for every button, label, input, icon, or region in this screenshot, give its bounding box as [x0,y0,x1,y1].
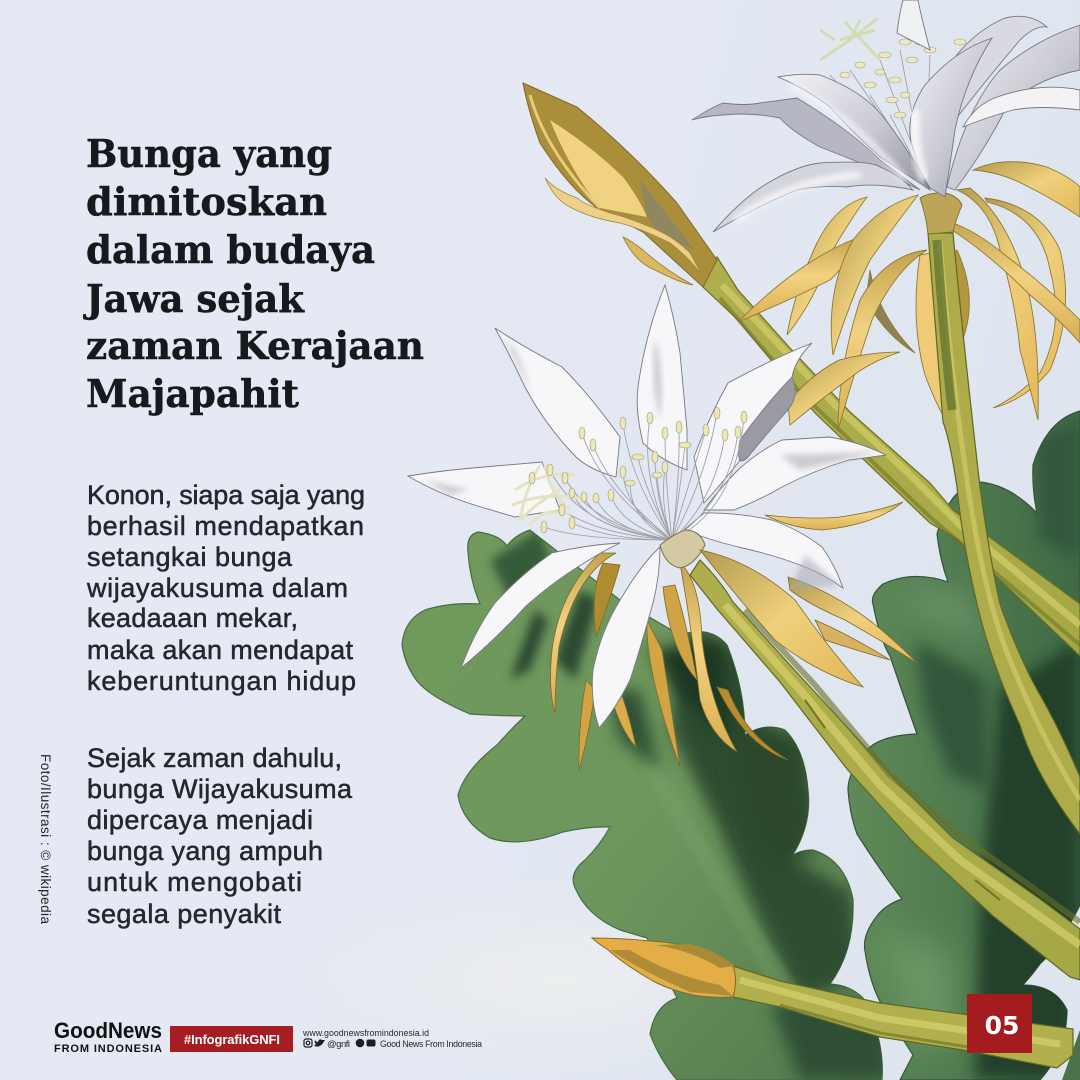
icon: youtube [366,1040,376,1046]
central flower anthers [529,407,747,533]
title: Majapahit [86,371,299,416]
central flower gold sepals [551,352,917,770]
flower: central white flower [408,285,917,770]
text block: keberuntungan: berhasil mendapatkan [87,511,364,541]
photo credit: Foto/Ilustrasi : © wikipedia [38,754,53,924]
text block: pengobatan: untuk mengobati [87,867,302,897]
leaf: large left cactus leaf [402,530,890,1080]
website and social media [302,1028,482,1050]
text block: keberuntungan: setangkai bunga [87,542,293,572]
stem: central flower stem [690,560,1080,980]
hashtag badge [170,1026,293,1052]
bud: upper left flower bud [523,83,717,287]
text block: pengobatan [87,743,353,929]
text block: keberuntungan: Konon, siapa saja yang [87,480,365,510]
top flower stem [928,233,1080,834]
top flower stamens [820,18,960,180]
top flower gold sepals [738,162,1080,430]
central flower petals [408,285,886,728]
leaf: small sliver bottom right [1062,1030,1080,1080]
text block: keberuntungan [86,480,365,696]
website and social media: @gnfi [327,1039,350,1050]
title: Bunga yang [86,131,332,176]
central flower filaments [544,413,744,540]
icon: twitter [314,1039,325,1047]
text block: pengobatan: dipercaya menjadi [87,805,313,835]
stem: bottom stem [733,966,1073,1068]
top flower receptacle [920,193,962,234]
text block: keberuntungan: keadaaan mekar, [87,603,298,633]
text block: pengobatan: bunga Wijayakusuma [87,774,353,804]
flower: top white flower [692,0,1080,834]
text block: keberuntungan: wijayakusuma dalam [86,573,348,603]
logo: GoodNews From Indonesia [54,1018,162,1055]
website and social media: Good News From Indonesia [380,1039,482,1049]
central flower curled stamens [512,465,585,525]
central flower front sepal over stem [700,550,863,687]
icon: instagram [304,1039,312,1047]
title: zaman Kerajaan [86,323,424,368]
title: dimitoskan [86,179,327,224]
title: dalam budaya [86,227,375,272]
text block: pengobatan: Sejak zaman dahulu, [87,743,342,773]
top flower petals [692,0,1080,232]
logo: GoodNews From Indonesia: FROM INDONESIA [54,1043,162,1055]
page number badge [967,994,1032,1053]
central flower petal shading [425,335,880,590]
text block: keberuntungan: maka akan mendapat [87,635,353,665]
title [83,131,424,416]
bud: lower flower bud [592,938,736,997]
text block: pengobatan: segala penyakit [87,899,281,929]
hashtag badge: #InfografikGNFI [184,1032,280,1047]
title: Jawa sejak [83,276,305,321]
top flower anthers [840,39,966,118]
text block: pengobatan: bunga yang ampuh [87,836,323,866]
text block: keberuntungan: keberuntungan hidup [87,666,356,696]
leaf: right cactus leaf [848,411,1080,1080]
website and social media: www.goodnewsfromindonesia.id [302,1028,429,1038]
central flower base [660,530,705,568]
stem: upper bud stem [703,257,1080,656]
logo: GoodNews From Indonesia: GoodNews [54,1018,162,1043]
page number badge: 05 [985,1011,1019,1040]
icon: facebook [356,1039,364,1047]
